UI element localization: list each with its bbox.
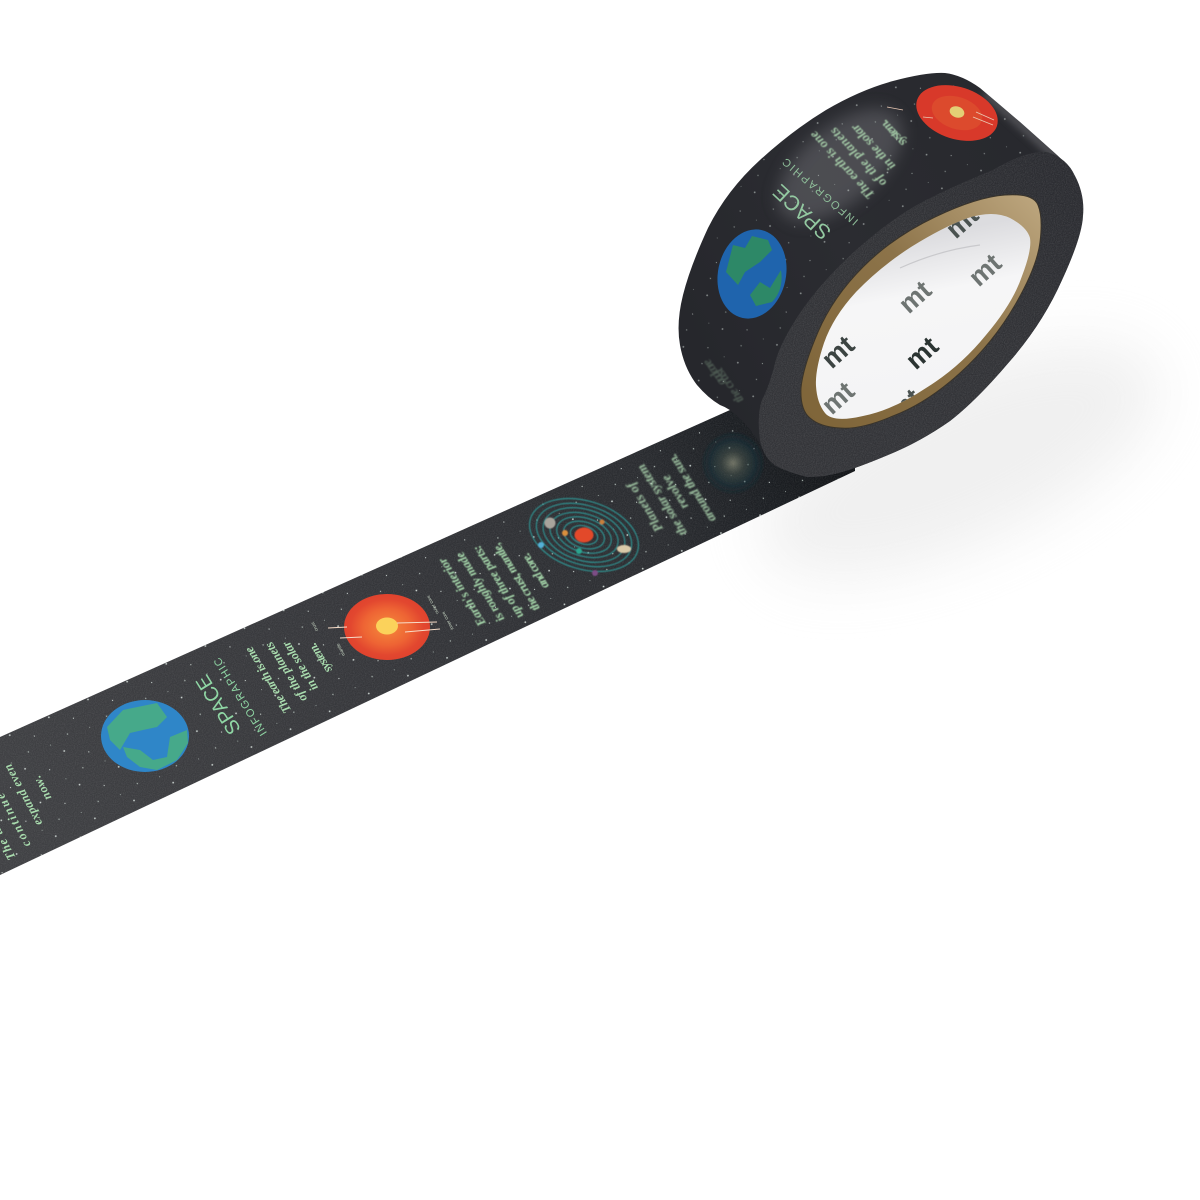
planets text: around the sun. [665,451,719,525]
interior text: is roughly made [453,549,507,625]
roll side face [759,152,1083,477]
universe caption: now. [30,773,54,803]
earth text: in the solar [279,638,321,693]
planets text: revolve [658,472,691,512]
roll heading: SPACE [769,179,836,244]
flat tape strip [0,410,855,875]
core inner white with mt logos: mt [940,200,984,244]
roll earth cross-section [886,85,998,141]
core inner white with mt logos: mt [963,248,1007,292]
interior text: and core. [518,550,552,592]
roll faint caption: the crust [711,365,746,407]
earth cross-section diagram [310,594,455,660]
roll faint caption [704,359,744,402]
earth cross-section diagram: inner core [441,610,455,631]
roll text: The earth is one [806,128,877,203]
core inner white with mt logos: mt [893,275,937,319]
core inner white with mt logos: mt [974,313,1018,357]
galaxy [701,431,765,495]
core inner white with mt logos: mt [883,383,927,427]
earth text: system. [305,640,335,677]
planets text: the solar system [633,462,690,539]
core inner white with mt logos [816,214,1030,419]
solar system diagram [521,486,647,584]
interior text [435,540,552,630]
earth text: The earth is one [242,644,294,716]
planets text: Planets of [623,478,666,535]
roll text: in the solar [847,120,898,174]
earth cross-section diagram: crust [310,621,319,632]
roll printed artwork [682,85,1058,402]
universe caption [0,762,54,863]
roll heading: INFOGRAPHIC [780,155,861,227]
core inner white with mt logos: mt [816,376,860,420]
heading: SPACE INFOGRAPHIC: SPACE [192,671,246,738]
roll planet earth [717,229,787,319]
earth text: of the planets [262,639,310,705]
core inner white with mt logos: mt [816,330,860,374]
roll faint caption: and core [699,356,729,389]
heading: SPACE INFOGRAPHIC: INFOGRAPHIC [212,655,270,738]
planet earth [101,700,189,772]
top edge highlight [985,92,1058,158]
earth cross-section diagram: mantle [335,642,346,657]
earth cross-section diagram: outer core [425,594,440,615]
roll text: system. [876,117,910,151]
interior text: the crust, mantle, [489,540,543,614]
planets text [623,451,719,539]
interior text: Earth's interior [435,555,489,630]
kraft core [801,195,1041,428]
roll shadow [729,295,1191,625]
interior text: up of three parts: [470,543,526,621]
roll outer surface [679,73,1083,477]
tape roll [670,70,1090,477]
core inner white with mt logos: mt [900,331,944,375]
roll text [810,119,908,200]
universe caption: expand even [1,762,45,828]
side face grain [759,152,1083,477]
roll text: of the planets [826,124,889,190]
surface highlight [774,104,906,226]
earth text [242,638,335,716]
